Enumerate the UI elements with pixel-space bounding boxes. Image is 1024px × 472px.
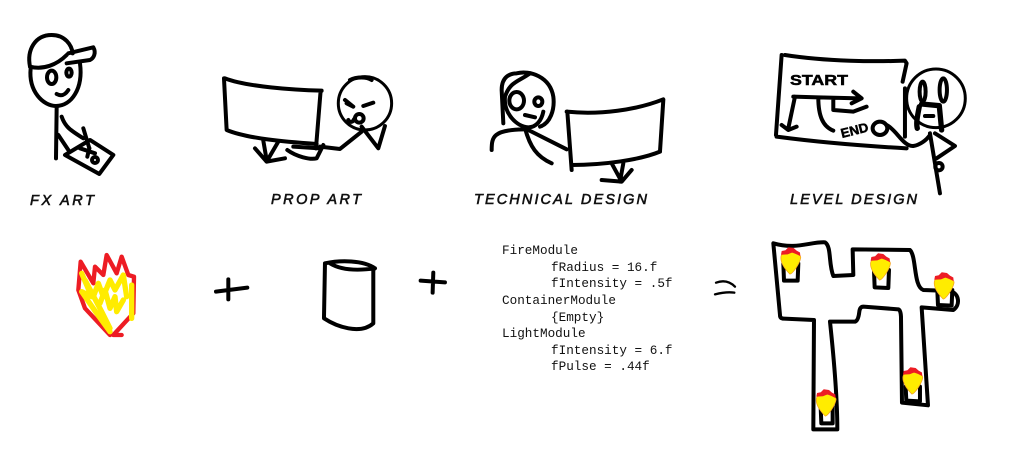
code block: module settings: {Empty} (551, 310, 604, 325)
fire 2 (871, 253, 890, 280)
label: level design: LEVEL DESIGN (790, 192, 918, 208)
whiteboard text: start: START (790, 72, 848, 89)
plus sign (216, 279, 247, 299)
icon: container cylinder (324, 261, 375, 329)
fire 4 (816, 389, 836, 416)
label: technical design: TECHNICAL DESIGN (474, 192, 648, 208)
figure: FX artist with cap and tablet (29, 35, 113, 174)
plus sign (421, 273, 445, 293)
whiteboard text: end: END (839, 120, 870, 141)
code block: module settings (502, 243, 673, 374)
level map with fires (773, 242, 958, 429)
code block: module settings: fIntensity = 6.f (551, 343, 673, 358)
code block: module settings: ContainerModule (502, 293, 616, 308)
code block: module settings: FireModule (502, 243, 578, 258)
icon: large fire (78, 255, 134, 335)
equals sign (715, 281, 735, 294)
figure: technical designer at monitor (492, 73, 663, 182)
fire 3 (934, 272, 954, 299)
figure: prop artist at monitor (224, 77, 392, 162)
code block: module settings: LightModule (502, 326, 586, 341)
code block: module settings: fIntensity = .5f (551, 276, 673, 291)
code block: module settings: fRadius = 16.f (551, 260, 657, 275)
label: FX art: FX ART (30, 193, 95, 209)
code block: module settings: fPulse = .44f (551, 359, 650, 374)
figure: level designer at whiteboard (776, 55, 965, 193)
fire 5 (903, 367, 923, 394)
label: prop art: PROP ART (271, 192, 362, 208)
fire 1 (781, 247, 801, 274)
